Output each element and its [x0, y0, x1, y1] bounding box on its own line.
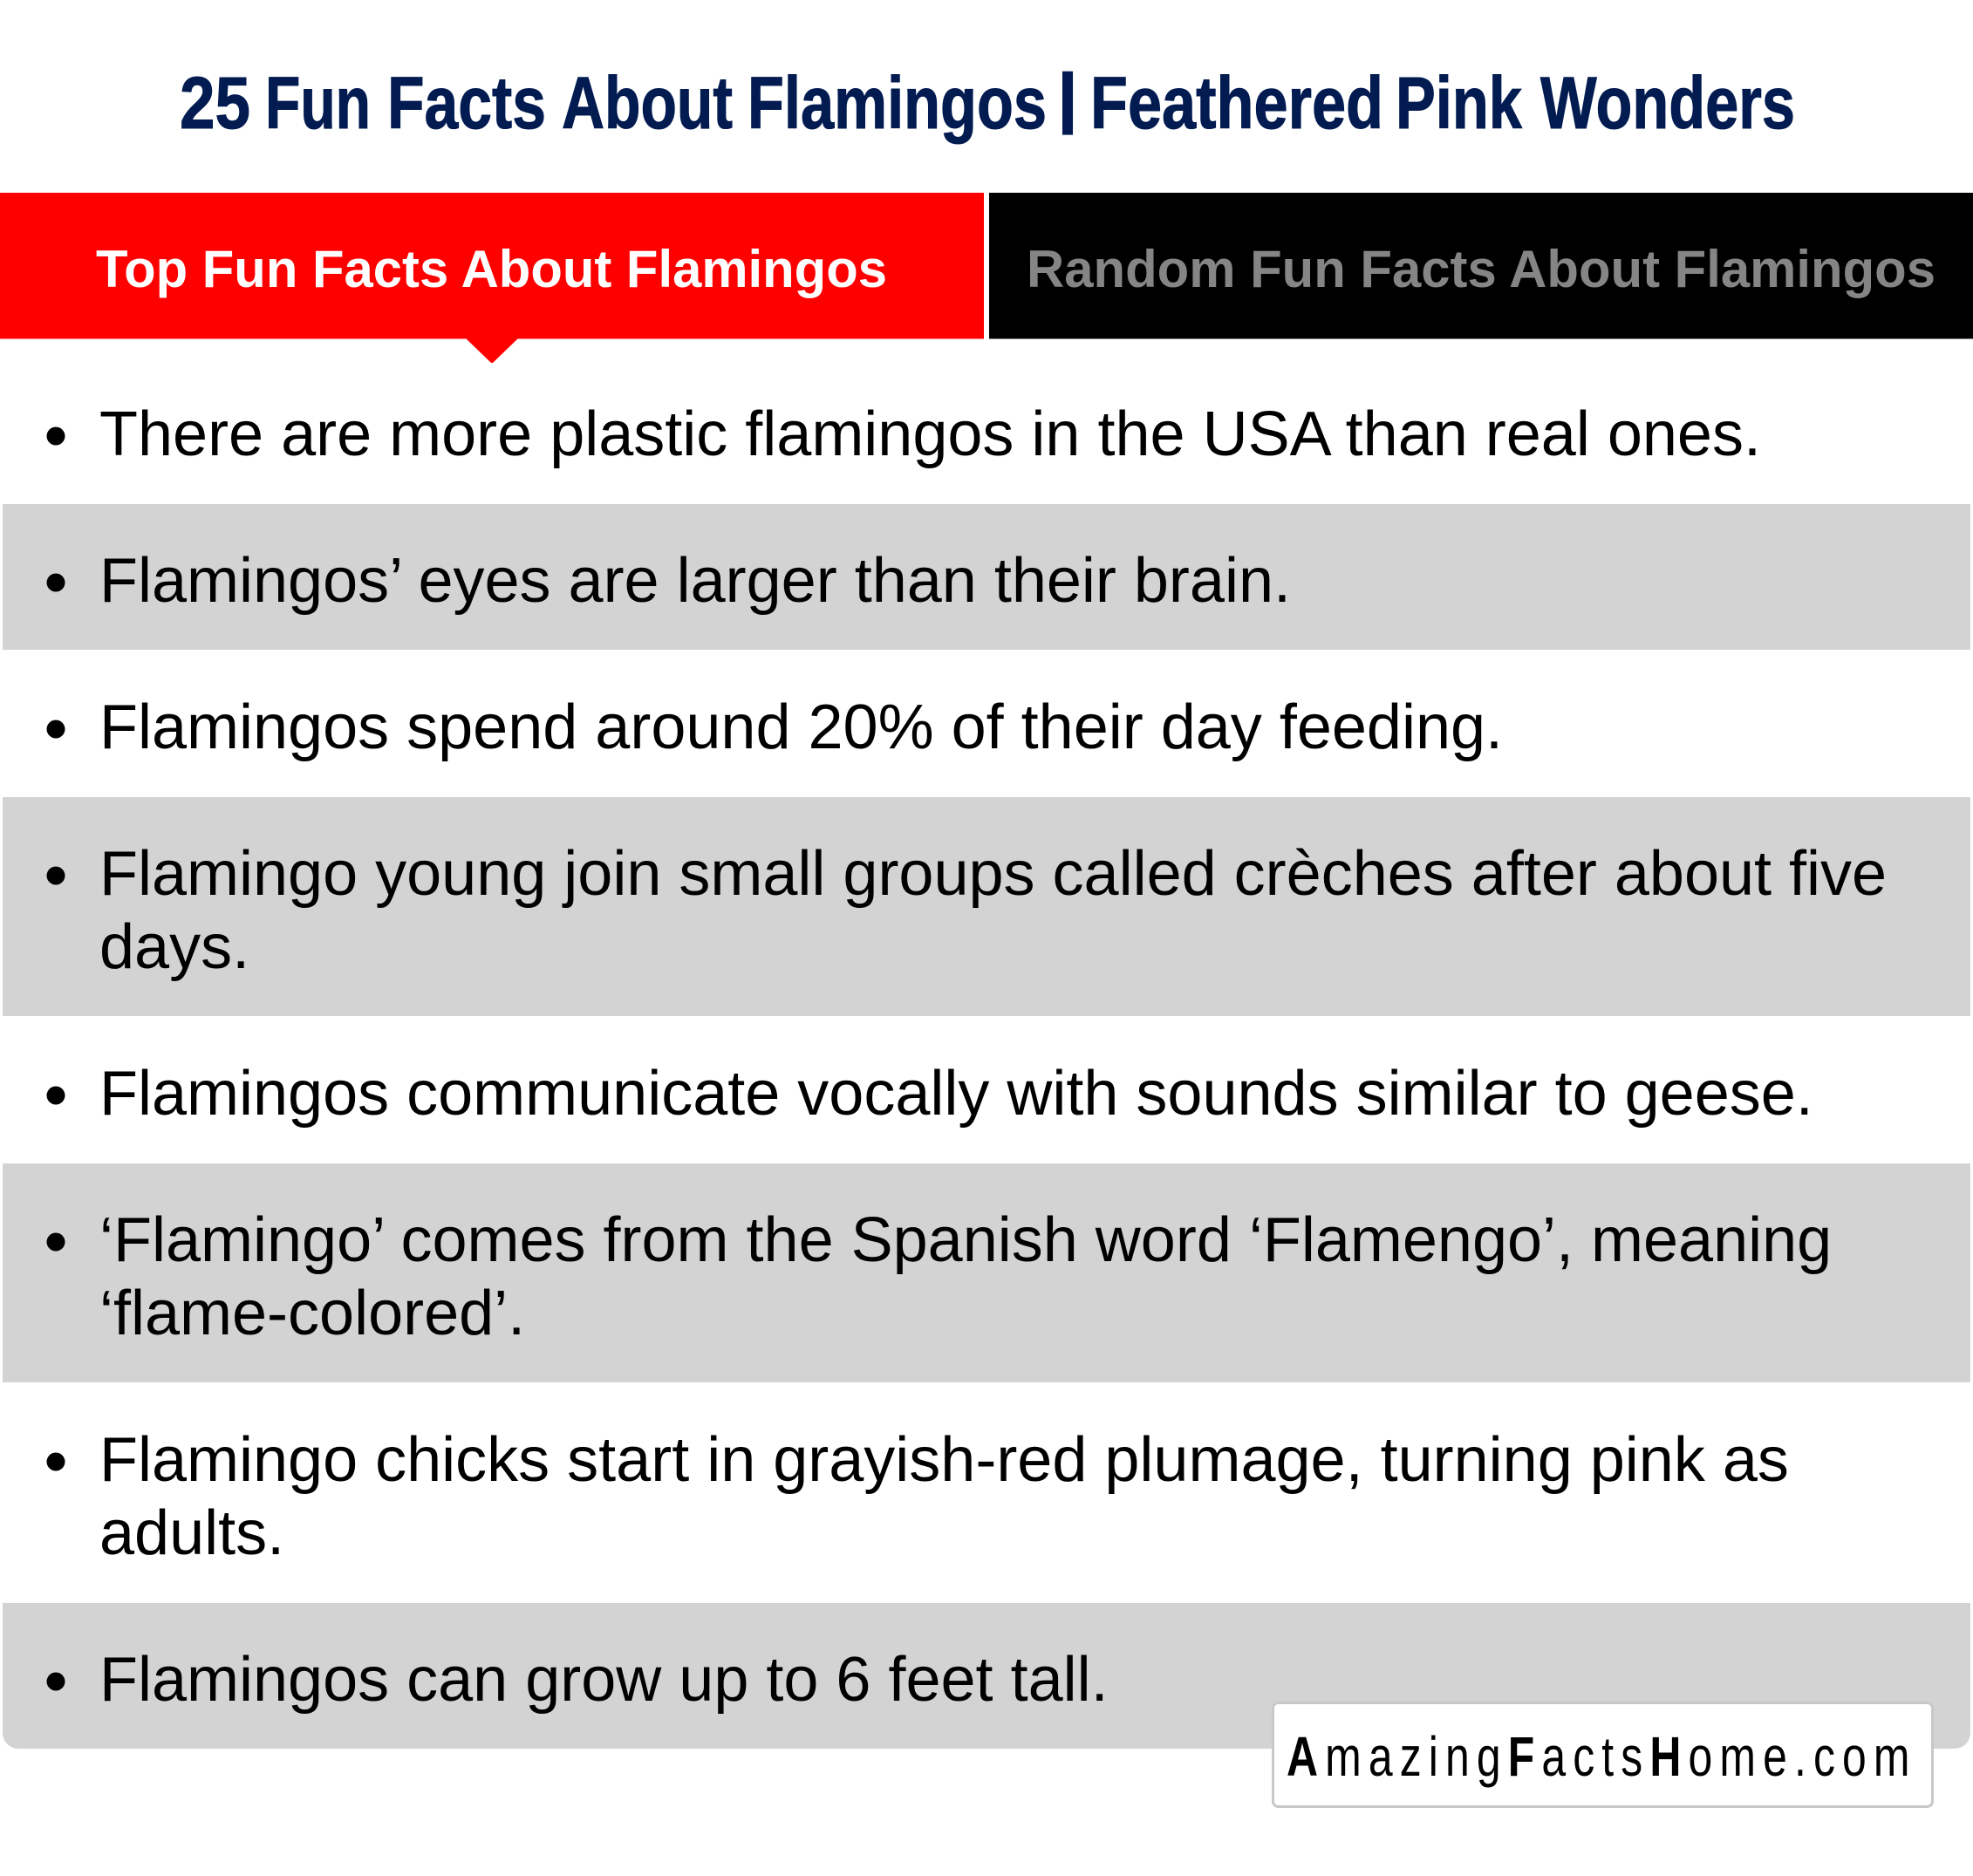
fact 7: adults.	[99, 1498, 284, 1568]
fact 5: Flamingos communicate vocally with sounds similar to geese.	[99, 1059, 1813, 1129]
fact 2: Flamingos’ eyes are larger than their brain.	[99, 546, 1291, 616]
fact 6	[3, 1163, 1970, 1382]
fact 8: Flamingos can grow up to 6 feet tall.	[99, 1645, 1109, 1715]
fact 7: Flamingo chicks start in grayish-red plumage, turning pink as	[99, 1425, 1789, 1495]
title: Feathered	[1090, 62, 1383, 144]
fact 2	[3, 504, 1970, 650]
tab: top fun facts (active): Top Fun Facts About Flamingos	[96, 240, 887, 298]
title: Pink	[1396, 62, 1522, 144]
watermark badge	[1273, 1702, 1933, 1807]
fact 4: days.	[99, 912, 249, 982]
fact 4: Flamingo young join small groups called crèches after about five	[99, 839, 1887, 909]
fact 4	[3, 797, 1970, 1016]
tab: random fun facts (inactive): Random Fun Facts About Flamingos	[1027, 240, 1935, 298]
title: Facts	[387, 62, 546, 144]
fact 8	[3, 1603, 1970, 1749]
fact 6: ‘flame-colored’.	[99, 1279, 525, 1348]
title	[180, 61, 1795, 144]
fact 6: ‘Flamingo’ comes from the Spanish word ‘Flamengo’, meaning	[99, 1205, 1832, 1275]
fact 1: There are more plastic flamingos in the USA than real ones.	[99, 399, 1761, 469]
title: About	[562, 62, 733, 144]
title: |	[1059, 61, 1076, 134]
fact 3: Flamingos spend around 20% of their day feeding.	[99, 692, 1503, 762]
fact 7	[47, 1425, 1789, 1568]
watermark badge: AmazingFactsHome.com	[1287, 1726, 1909, 1788]
tab: top fun facts (active)	[0, 193, 984, 363]
title: Fun	[265, 62, 371, 144]
tab: random fun facts (inactive)	[989, 193, 1973, 338]
title: Wonders	[1540, 62, 1795, 144]
title: 25	[180, 62, 250, 144]
title: Flamingos	[748, 62, 1047, 144]
